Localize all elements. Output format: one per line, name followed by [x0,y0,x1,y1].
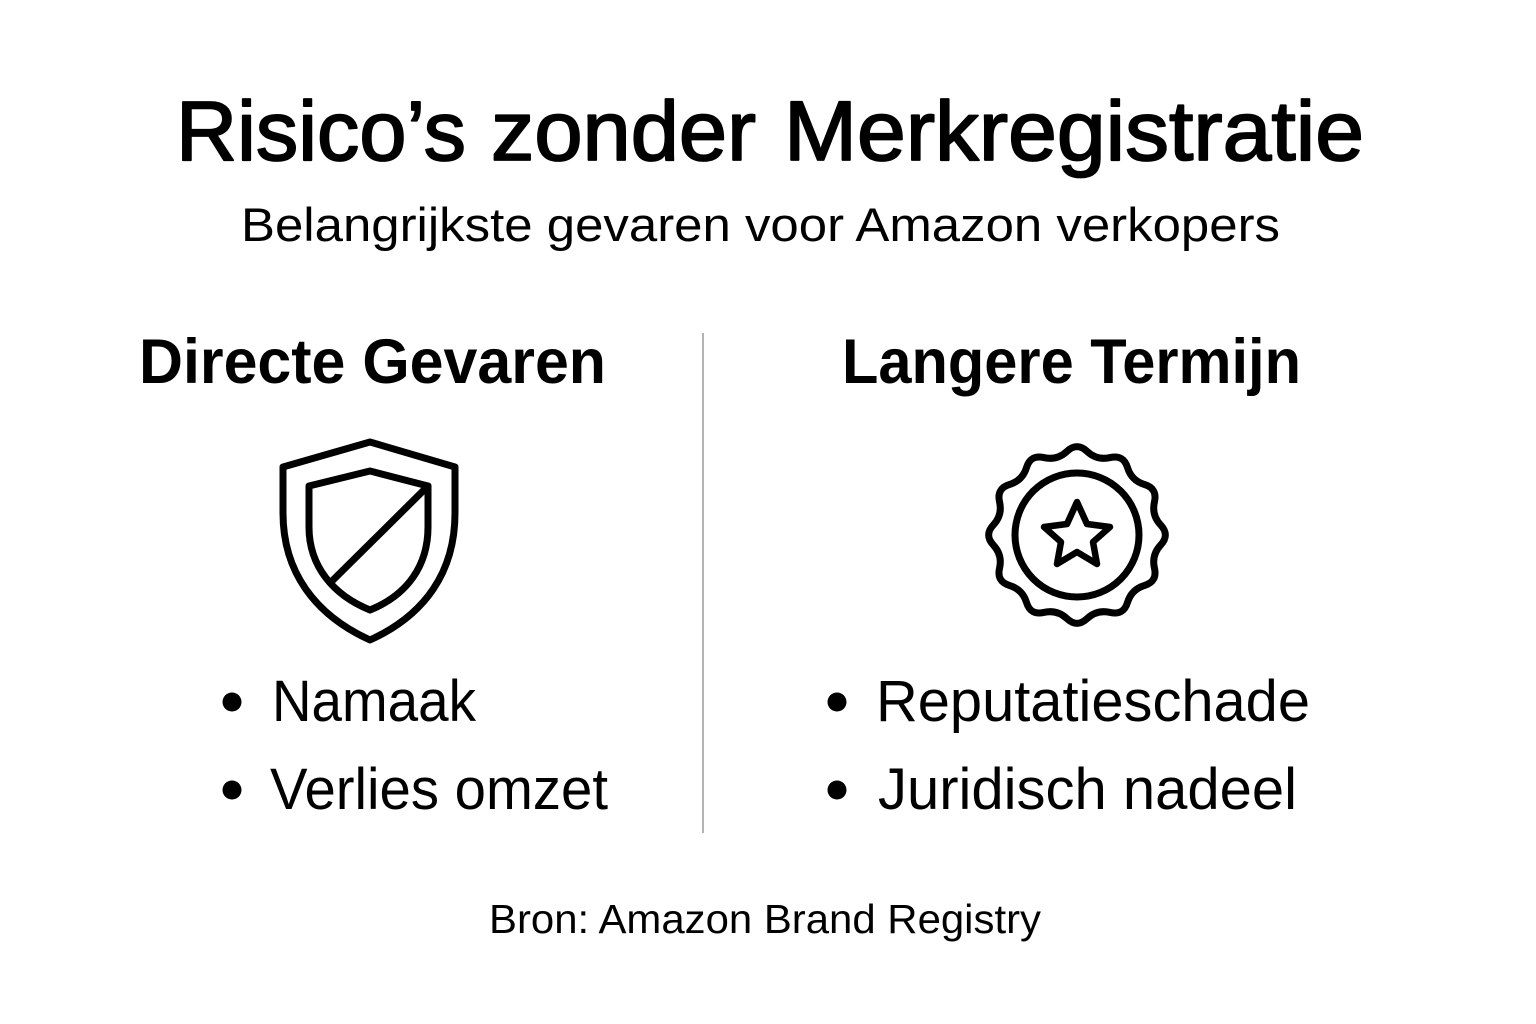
title: Risico’s [176,84,466,178]
bullet list: langere termijn: Juridisch nadeel [878,757,1297,822]
panel: langere termijn [828,327,1310,822]
icon: badge with star [989,447,1165,623]
bullet list: langere termijn: Reputatieschade [876,669,1310,734]
heading: directe gevaren: Directe Gevaren [139,327,606,397]
panel: directe gevaren [139,327,608,822]
bullet list: directe gevaren: Verlies omzet [270,757,608,822]
subtitle: Belangrijkste gevaren voor Amazon verkopers [241,198,1280,251]
heading: langere termijn: Langere Termijn [842,327,1301,397]
title: Merkregistratie [784,84,1364,178]
title [176,84,1364,178]
source note: Bron: Amazon Brand Registry [489,896,1042,942]
bullet list: directe gevaren [222,669,608,822]
bullet list: directe gevaren: Namaak [272,669,477,734]
icon: shield [283,442,455,640]
title: zonder [491,84,756,178]
bullet list: langere termijn [828,669,1310,822]
